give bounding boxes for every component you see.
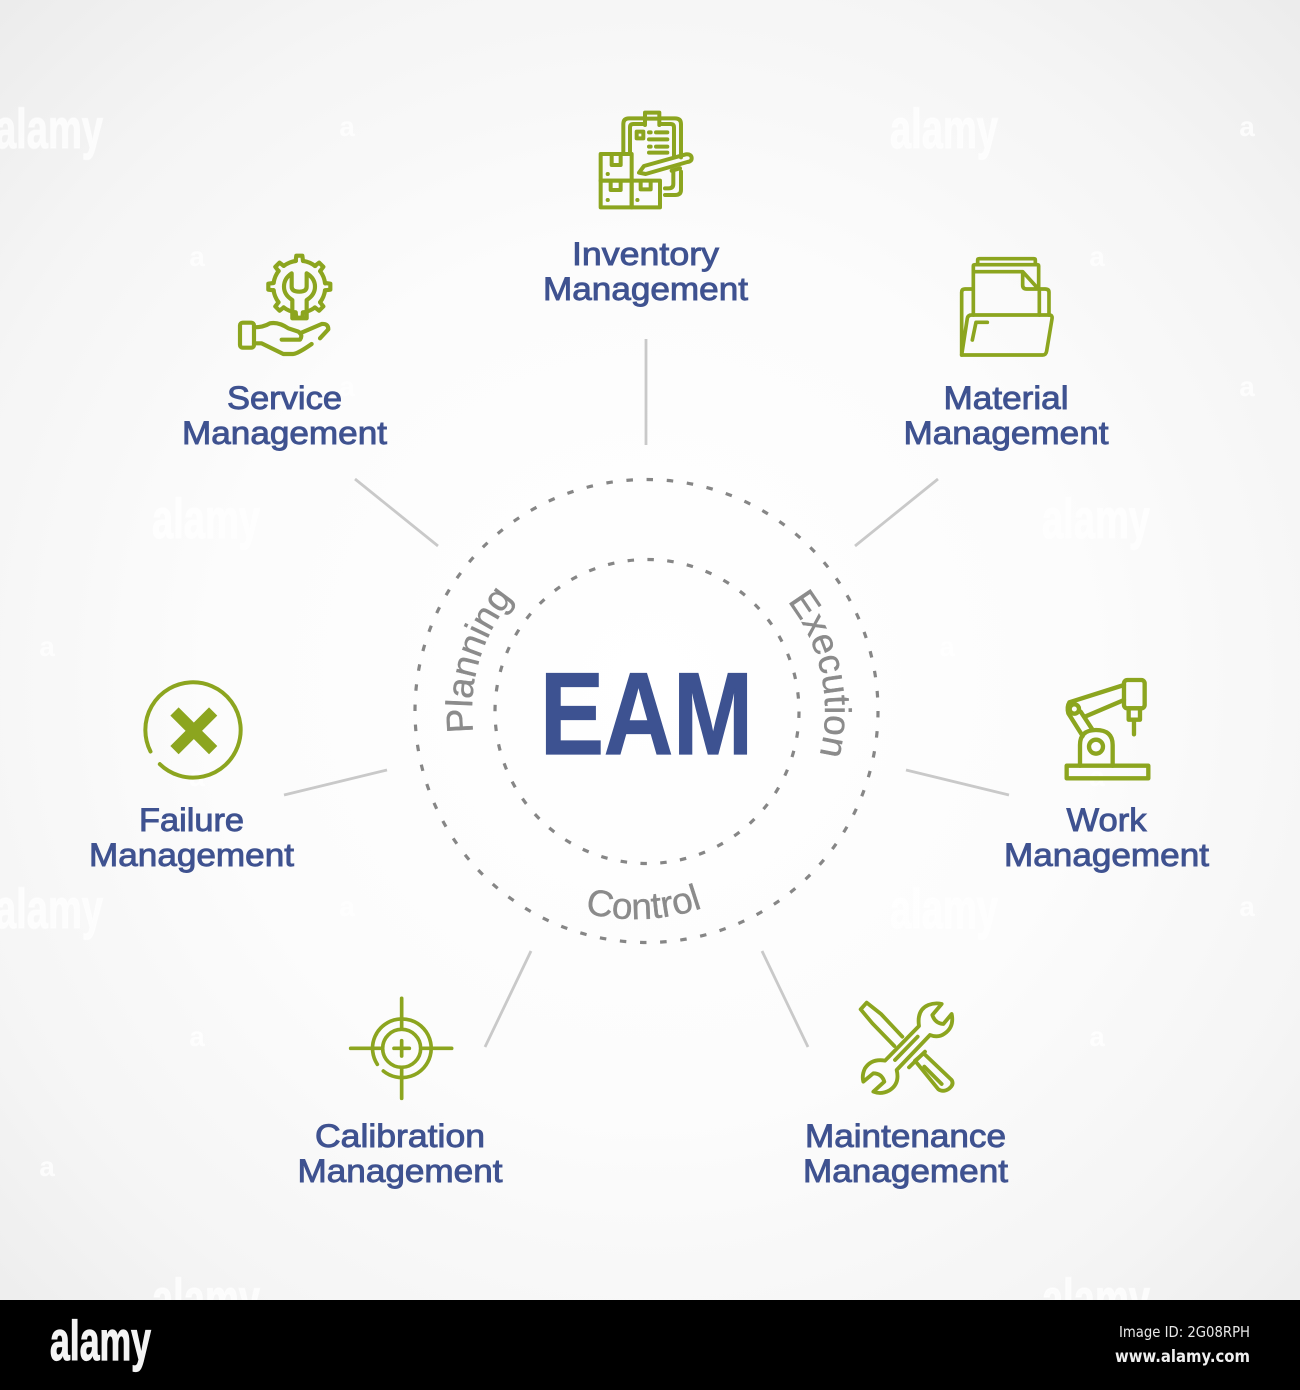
ring label: Control: Control [588,883,700,920]
connector lines [284,339,1009,1047]
icon: crossed screwdriver and wrench [861,1003,953,1093]
outer dashed ring [415,480,878,942]
item: Service Management [182,256,387,451]
icon: clipboard with boxes [601,113,692,207]
footer bar [0,1300,1300,1390]
icon: robot arm [1067,680,1148,778]
watermarks: a [189,761,205,792]
watermarks: alamy [1042,1267,1150,1330]
watermarks: a [1089,241,1105,272]
label: Management [803,1153,1008,1189]
footer logo: alamy [50,1309,151,1372]
label: Management [1004,837,1209,873]
watermarks: a [1239,111,1255,142]
item: Calibration Management [298,998,503,1189]
label: Management [298,1153,503,1189]
label: Material [944,380,1068,416]
label [1004,802,1209,873]
item: Inventory Management [543,113,748,307]
watermarks: a [339,891,355,922]
ring label: Execution: Execution [789,589,852,756]
icon: hand with gear and wrench [240,256,330,354]
label: Service [227,380,342,416]
label: Management [182,415,387,451]
label [182,380,387,451]
icon: circled cross [145,682,241,778]
watermarks: a [39,1151,55,1182]
label [904,380,1109,451]
watermarks: a [1089,761,1105,792]
label [543,236,748,307]
label: Failure [139,802,244,838]
item: Maintenance Management [803,1003,1008,1189]
watermarks: a [1089,1021,1105,1052]
icon: folder with documents [962,259,1052,355]
ring label: Planning: Planning [445,588,516,731]
item: Material Management [904,259,1109,451]
center title EAM: EAM [540,648,753,779]
watermarks: a [1239,371,1255,402]
label: Management [543,271,748,307]
watermarks: a [39,631,55,662]
label: Management [89,837,294,873]
watermarks: a [939,631,955,662]
watermarks: a [1239,891,1255,922]
label: Inventory [572,236,719,272]
watermarks: a [189,1021,205,1052]
label [89,802,294,873]
watermarks: a [189,241,205,272]
label: Work [1066,802,1148,838]
label: Management [904,415,1109,451]
watermarks: alamy [152,1267,260,1330]
watermarks: a [339,371,355,402]
item: Work Management [1004,680,1209,873]
label [298,1118,503,1189]
icon: crosshair target [351,998,452,1098]
watermarks: alamy [1042,487,1150,550]
footer image id: Image ID: 2G08RPH [1119,1323,1250,1341]
watermarks: a [939,1151,955,1182]
label: Calibration [315,1118,485,1154]
watermarks: alamy [890,877,998,940]
label: Maintenance [805,1118,1006,1154]
footer website: www.alamy.com [1115,1347,1250,1366]
watermarks: alamy [890,97,998,160]
watermarks: alamy [152,487,260,550]
inner dashed ring [495,560,799,864]
label [803,1118,1008,1189]
item: Failure Management [89,682,294,873]
watermarks: a [339,111,355,142]
